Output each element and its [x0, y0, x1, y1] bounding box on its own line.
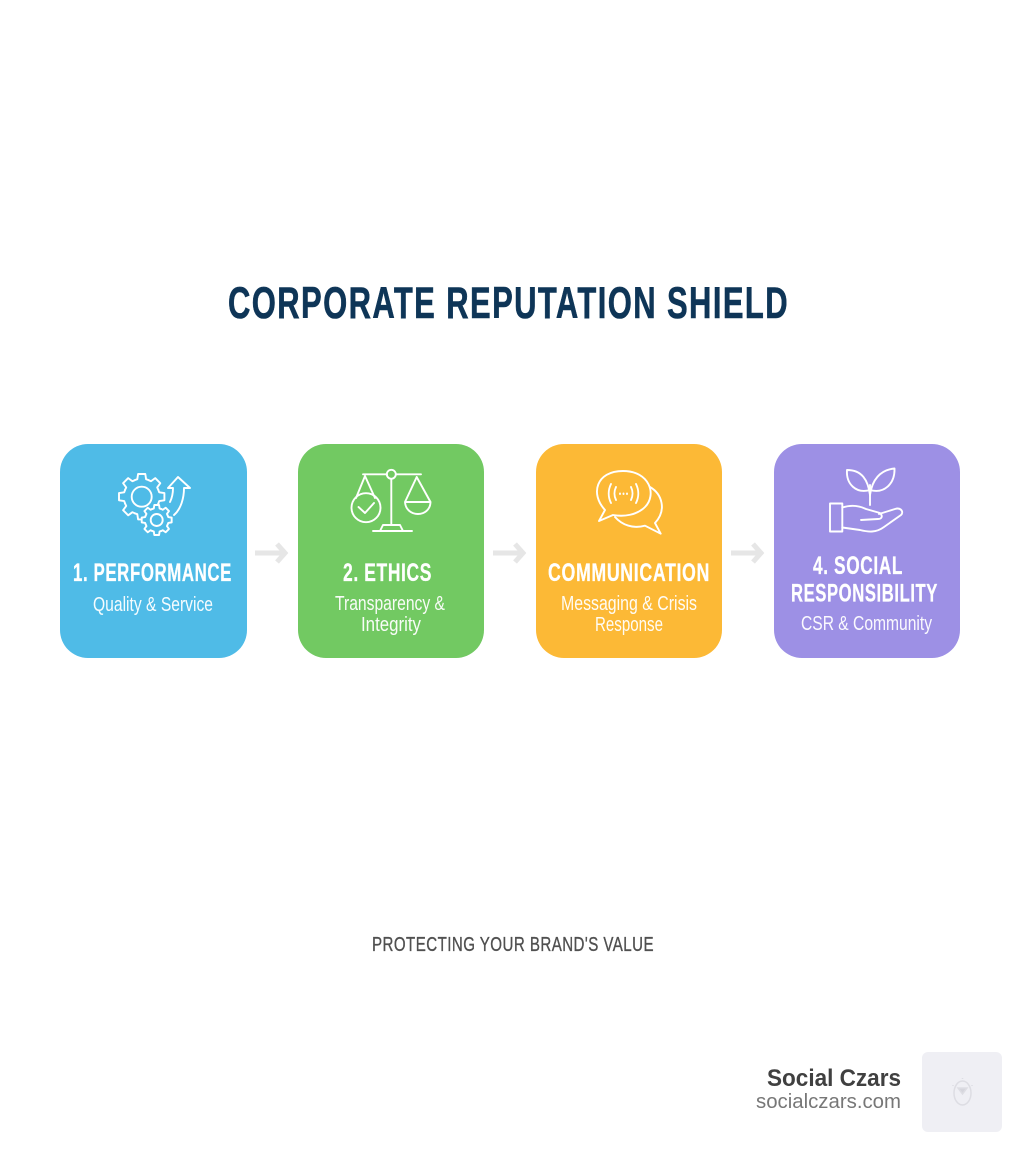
text: communication detail: Messaging & Crisis — [561, 593, 697, 615]
panel: ethics — [298, 444, 484, 658]
heading: communication: COMMUNICATION — [548, 559, 710, 587]
title: CORPORATE REPUTATION SHIELD — [228, 279, 789, 328]
text: social detail: CSR & Community — [801, 613, 932, 635]
panel: communication — [536, 444, 722, 658]
heading: ethics: 2. ETHICS — [343, 559, 432, 587]
icon: speech bubbles — [597, 471, 662, 534]
text: performance detail: Quality & Service — [93, 594, 213, 616]
icon: scales — [352, 470, 430, 531]
heading: performance: 1. PERFORMANCE — [73, 559, 232, 587]
text: ethics detail: Transparency & — [335, 593, 446, 615]
icon: gears with up arrow — [119, 474, 190, 535]
logo placeholder — [922, 1052, 1002, 1132]
text: communication detail line 2: Response — [595, 614, 663, 636]
heading: social: 4. SOCIAL — [813, 552, 903, 580]
brand url: socialczars.com — [756, 1091, 901, 1113]
text: ethics detail line 2: Integrity — [361, 614, 421, 636]
brand name: Social Czars — [767, 1065, 901, 1092]
heading: responsibility: RESPONSIBILITY — [791, 580, 938, 608]
arrow 1 — [255, 544, 285, 562]
icon: bear — [953, 1078, 972, 1105]
icon: hand with plant — [830, 468, 902, 532]
panel: performance — [60, 444, 247, 658]
panel: social responsibility — [774, 444, 960, 658]
arrow 2 — [493, 544, 523, 562]
arrow 3 — [731, 544, 761, 562]
tagline: PROTECTING YOUR BRAND'S VALUE — [372, 934, 654, 956]
